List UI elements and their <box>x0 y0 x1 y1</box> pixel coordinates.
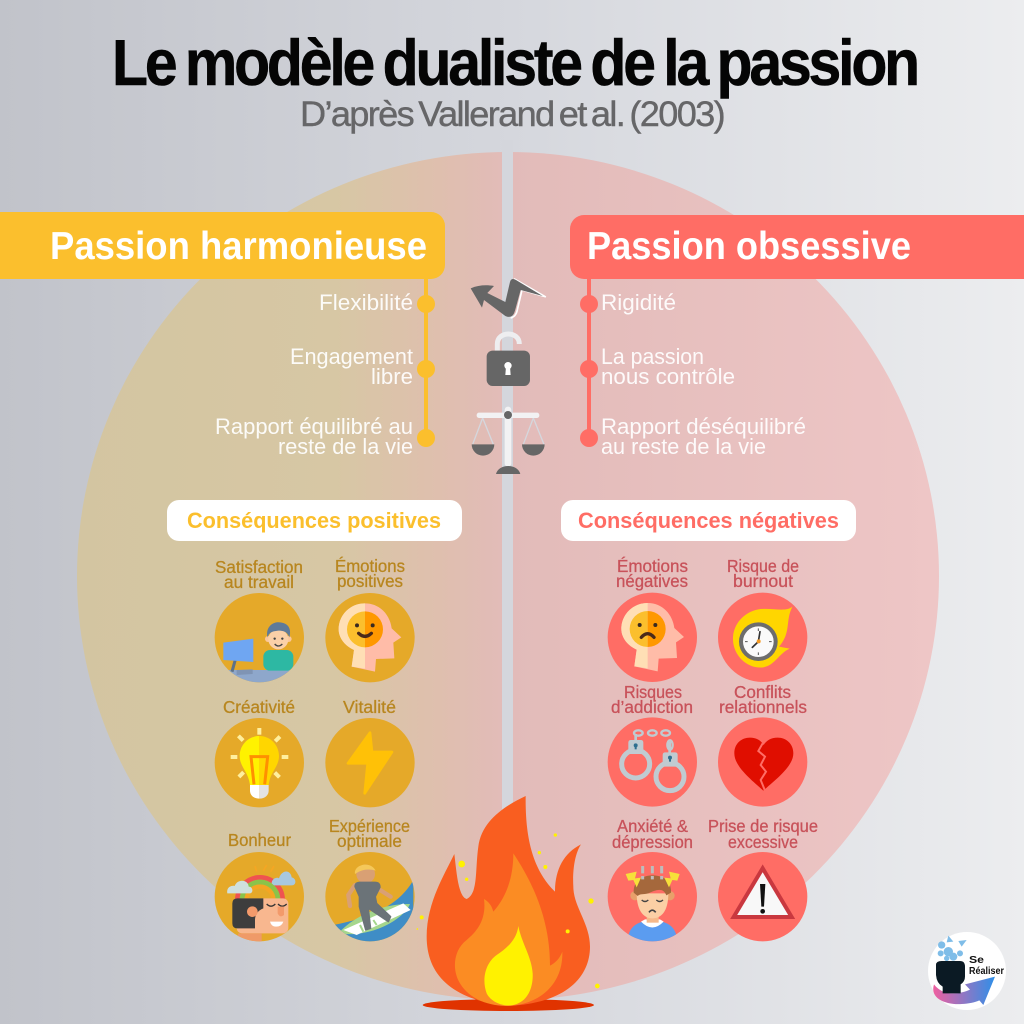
text: traits obsessifs: La passion <box>601 344 704 369</box>
labels: conséquences négatives: dépression <box>612 832 693 852</box>
labels: conséquences positives: Vitalité <box>343 697 396 717</box>
text: traits obsessifs: nous contrôle <box>601 364 735 389</box>
icon: zigzag arrow <box>471 279 545 318</box>
labels: conséquences négatives: Prise de risque <box>708 816 818 836</box>
logo: Se Réaliser <box>928 932 1006 1010</box>
heading banner: passion harmonieuse <box>0 212 445 279</box>
text: traits obsessifs: au reste de la vie <box>601 434 766 459</box>
callout: conséquences négatives <box>561 500 856 541</box>
icon: satisfaction au travail <box>214 593 304 682</box>
labels: conséquences positives: Créativité <box>223 697 295 717</box>
icon: balance scale <box>472 407 545 474</box>
text: traits harmonieux: reste de la vie <box>278 434 413 459</box>
labels: conséquences positives <box>215 556 410 851</box>
icon: prise de risque excessive <box>718 852 807 941</box>
title: Le modèle dualiste de la passion <box>112 26 917 99</box>
icon: expérience optimale <box>325 852 415 943</box>
icon: créativité <box>215 718 304 807</box>
panel: passion obsessive <box>570 215 1024 459</box>
panel: passion harmonieuse <box>0 212 445 459</box>
connector: left timeline <box>417 270 435 447</box>
icon: émotions positives <box>325 593 415 682</box>
icon: risques d'addiction <box>608 717 697 807</box>
labels: conséquences négatives: Conflits <box>734 682 791 702</box>
icon: émotions négatives <box>608 593 697 682</box>
icon: anxiété et dépression <box>608 852 697 942</box>
labels: conséquences positives: positives <box>337 571 403 591</box>
heading banner: passion harmonieuse: Passion harmonieuse <box>50 225 427 268</box>
labels: conséquences positives: Émotions <box>335 556 405 576</box>
labels: conséquences négatives: négatives <box>616 571 688 591</box>
labels: conséquences positives: Bonheur <box>228 830 291 850</box>
heading banner: passion obsessive: Passion obsessive <box>587 225 911 268</box>
text: traits harmonieux: Rapport équilibré au <box>215 414 413 439</box>
icon: bonheur <box>215 852 304 943</box>
icons: conséquences positives <box>210 593 415 943</box>
central disc split in two halves <box>77 140 939 1010</box>
labels: conséquences négatives: excessive <box>728 832 798 852</box>
text: traits obsessifs <box>601 290 806 459</box>
callout: conséquences négatives: Conséquences négatives <box>578 508 839 533</box>
icon: risque de burnout <box>718 593 807 682</box>
icon: open padlock <box>487 334 530 386</box>
text: traits harmonieux: Engagement <box>290 344 414 369</box>
callout: conséquences positives: Conséquences positives <box>187 508 441 533</box>
subtitle: D’après Vallerand et al. (2003) <box>300 95 724 134</box>
labels: conséquences positives: Satisfaction <box>215 557 303 577</box>
text: traits harmonieux: Flexibilité <box>319 290 413 315</box>
labels: conséquences positives: au travail <box>224 572 294 592</box>
text: traits harmonieux: libre <box>371 364 413 389</box>
labels: conséquences négatives: Risque de <box>727 556 799 576</box>
logo: Se Réaliser: Réaliser <box>969 966 1004 977</box>
icon: flame <box>416 796 600 1011</box>
text: traits obsessifs: Rigidité <box>601 290 676 315</box>
logo: Se Réaliser: Se <box>969 955 985 966</box>
icon: conflits relationnels <box>718 717 807 807</box>
labels: conséquences positives: Expérience <box>329 816 410 836</box>
icons: conséquences négatives <box>608 593 807 942</box>
labels: conséquences positives: optimale <box>337 831 402 851</box>
text: traits obsessifs: Rapport déséquilibré <box>601 414 806 439</box>
labels: conséquences négatives <box>611 556 818 852</box>
labels: conséquences négatives: d’addiction <box>611 697 693 717</box>
callout: conséquences positives <box>167 500 462 541</box>
text: traits harmonieux <box>215 290 414 459</box>
labels: conséquences négatives: relationnels <box>719 697 807 717</box>
labels: conséquences négatives: Anxiété & <box>617 816 688 836</box>
labels: conséquences négatives: Risques <box>624 682 682 702</box>
labels: conséquences négatives: Émotions <box>617 556 688 576</box>
heading banner: passion obsessive <box>570 215 1024 279</box>
labels: conséquences négatives: burnout <box>733 571 793 591</box>
connector: right timeline <box>580 270 598 447</box>
icon: vitalité <box>325 718 415 807</box>
